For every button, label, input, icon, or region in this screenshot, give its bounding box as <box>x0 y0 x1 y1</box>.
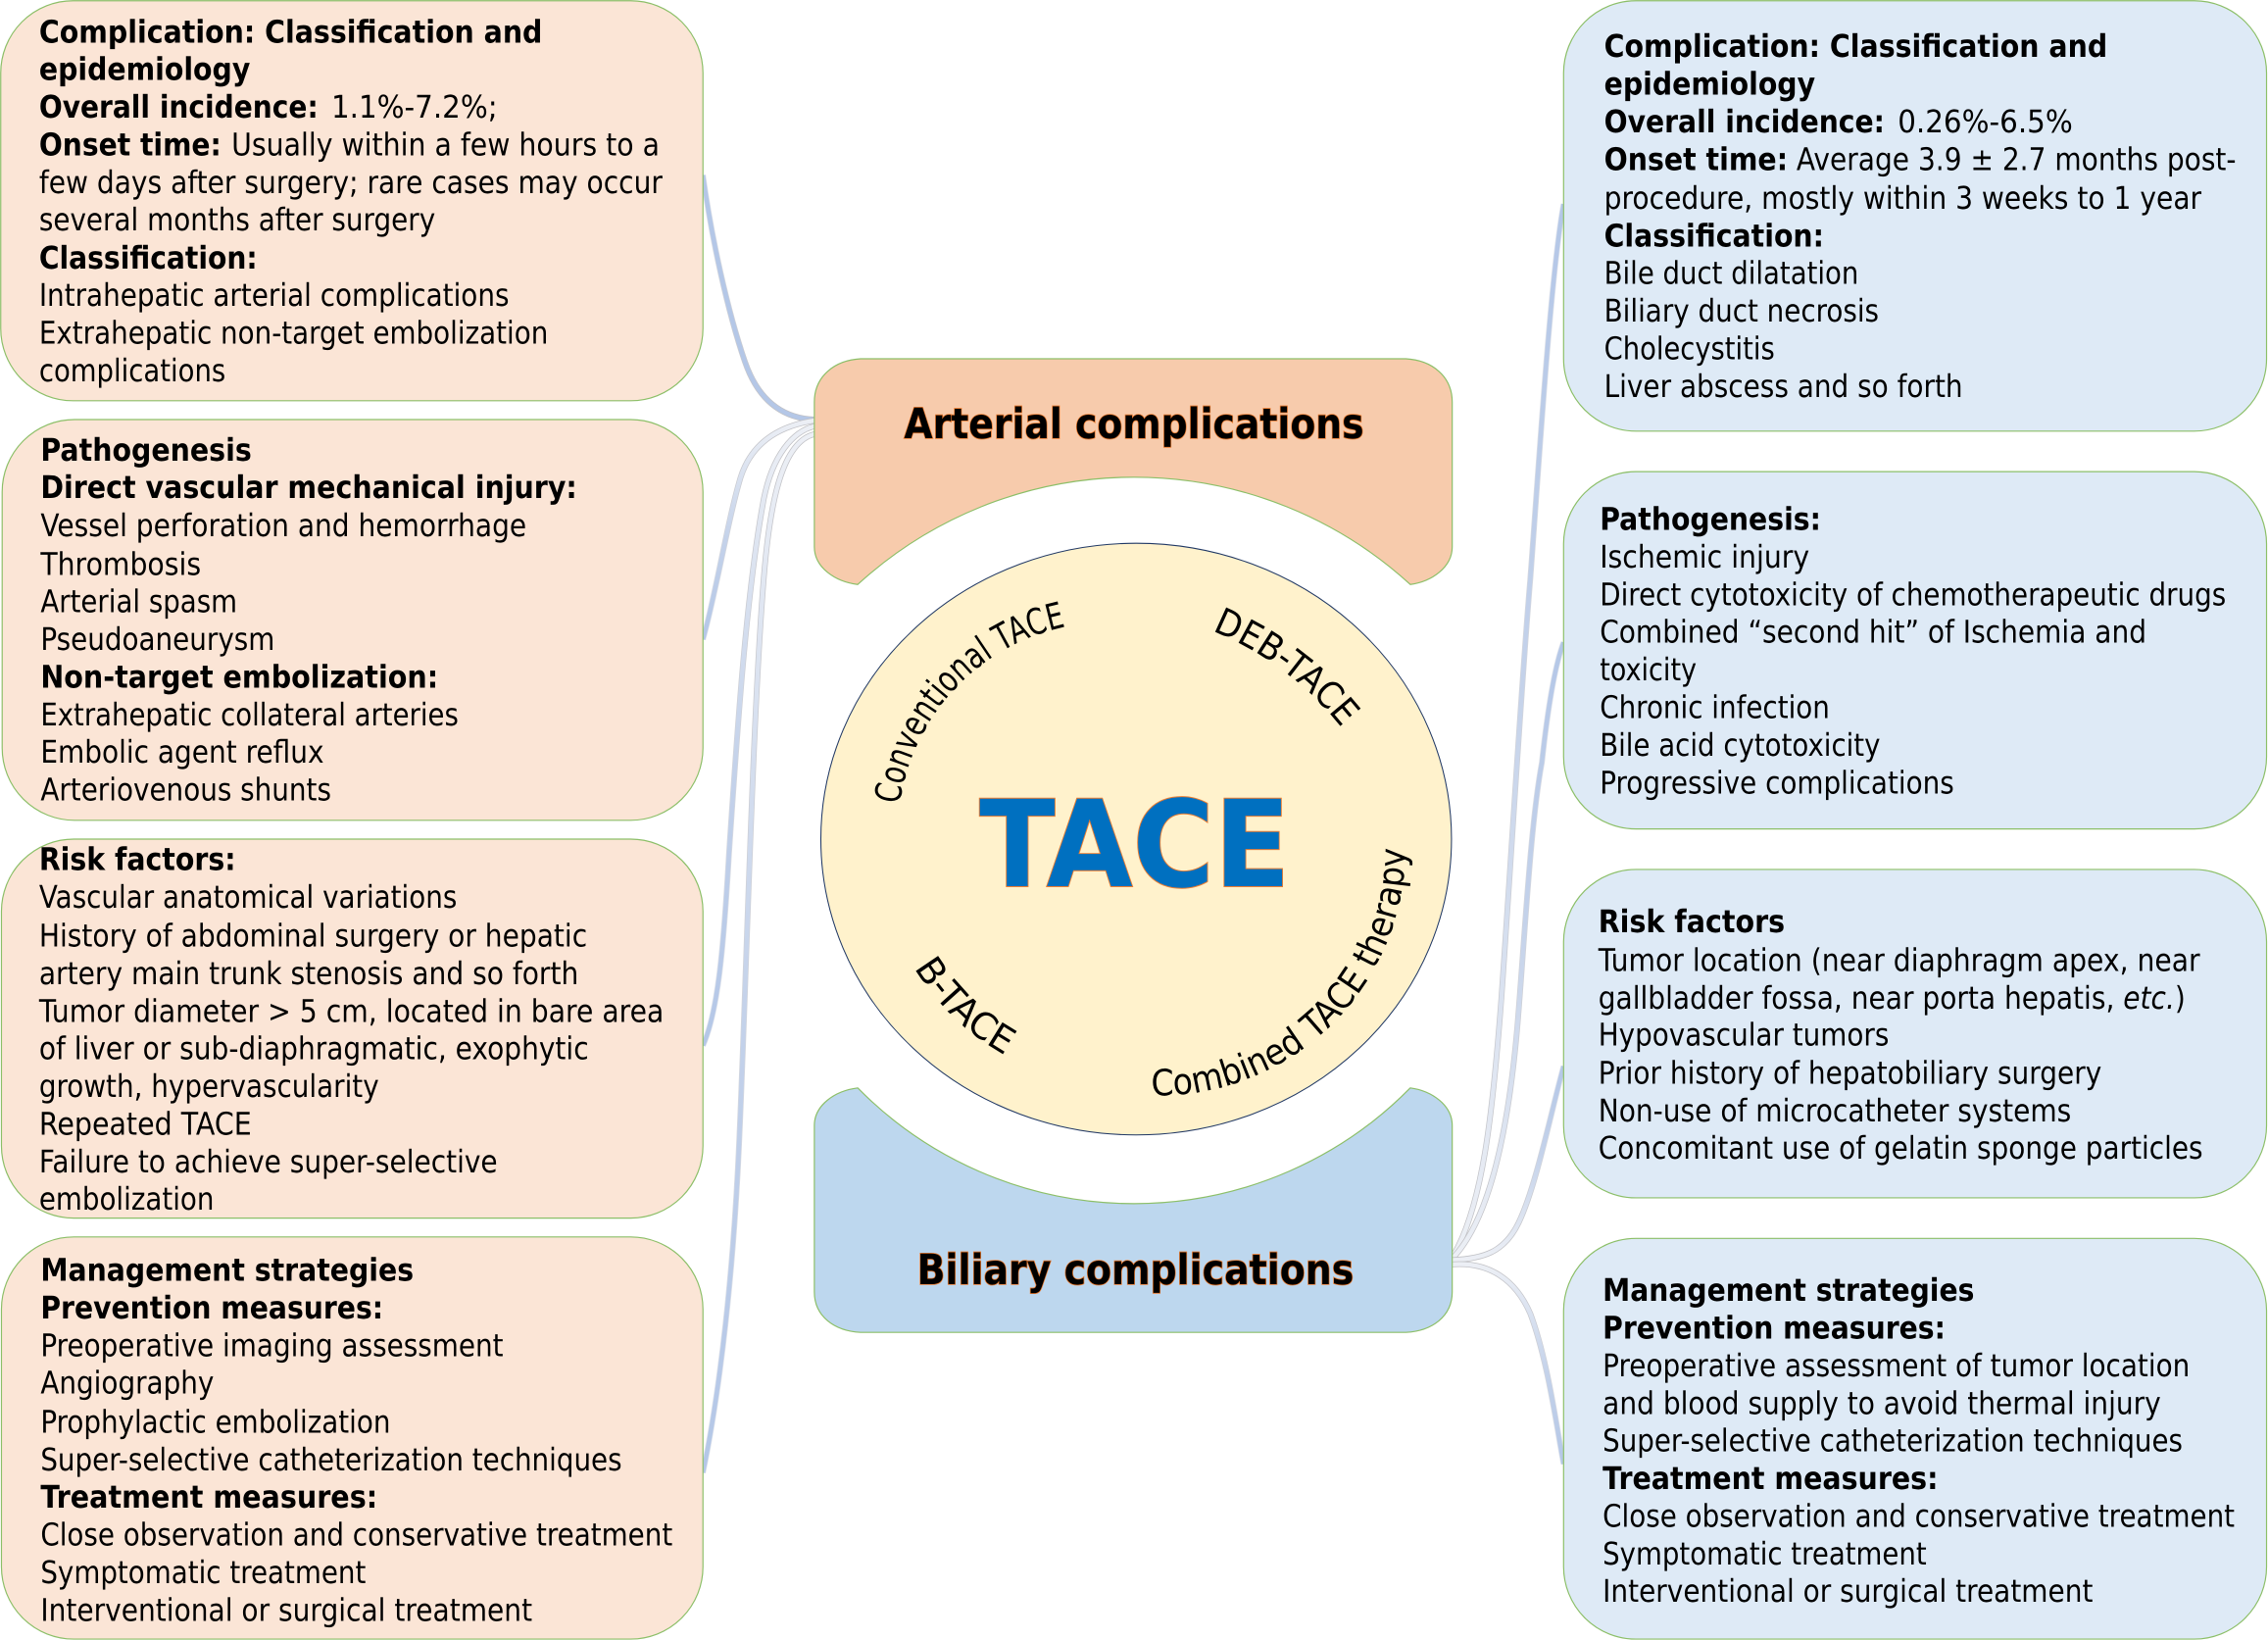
connectors: biliary complications to right panels <box>1453 204 1563 1465</box>
text block: arterial risk factors: Tumor diameter > 5 cm, located in bare area <box>38 994 664 1030</box>
text block: arterial pathogenesis: Non-target embolization: <box>40 660 438 696</box>
text block: biliary risk factors: Risk factors <box>1599 905 1785 941</box>
text block: arterial classification <box>39 15 663 390</box>
text block: biliary classification <box>1604 29 2237 406</box>
text block: biliary management: Interventional or surgical treatment <box>1602 1574 2093 1611</box>
text block: arterial management: Preoperative imaging assessment <box>40 1328 504 1365</box>
text block: biliary risk factors: Hypovascular tumors <box>1599 1018 1889 1054</box>
panel: arterial management strategies <box>1 1237 703 1639</box>
text block: arterial risk factors: Repeated TACE <box>39 1107 252 1143</box>
curved label: DEB-TACE: DEB-TACE <box>1215 608 1360 725</box>
text block: biliary classification: Overall incidence: <box>1604 105 1885 141</box>
text block: biliary risk factors: Prior history of hepatobiliary surgery <box>1599 1056 2102 1092</box>
text block: arterial management: Symptomatic treatment <box>40 1556 366 1592</box>
connectors: arterial complications to left panels <box>703 175 815 1472</box>
text block: arterial risk factors: of liver or sub-diaphragmatic, exophytic <box>39 1032 589 1068</box>
text block: biliary management <box>1602 1273 2235 1611</box>
text block: biliary pathogenesis: Ischemic injury <box>1600 540 1809 576</box>
panel: arterial classification and epidemiology <box>1 1 703 401</box>
text block: arterial pathogenesis: Vessel perforation and hemorrhage <box>40 509 526 545</box>
text block: arterial classification: Intrahepatic arterial complications <box>39 278 509 315</box>
text block: biliary pathogenesis: toxicity <box>1600 653 1697 689</box>
text block: arterial risk factors: Vascular anatomical variations <box>39 880 457 917</box>
title: TACE: TACE <box>979 774 1290 916</box>
text block: biliary classification: epidemiology <box>1604 67 1815 103</box>
text block: arterial classification: several months after surgery <box>39 203 435 239</box>
text block: arterial classification: 1.1%-7.2%; <box>331 90 498 126</box>
text block: arterial risk factors <box>38 842 664 1218</box>
text block: biliary classification: procedure, mostly within 3 weeks to 1 year <box>1604 181 2201 218</box>
text block: arterial pathogenesis <box>39 433 577 809</box>
text block: biliary pathogenesis: Combined “second hit” of Ischemia and <box>1600 616 2146 652</box>
text block: biliary classification: 0.26%-6.5% <box>1898 105 2073 141</box>
text block: biliary classification: Cholecystitis <box>1604 331 1775 368</box>
text block: arterial classification: Complication: Classification and <box>39 15 542 51</box>
text block: arterial risk factors: artery main trunk stenosis and so forth <box>39 957 578 993</box>
curved label: conventional TACE: Conventional TACE <box>874 602 1064 802</box>
text block: biliary management: Treatment measures: <box>1602 1462 1939 1498</box>
banner: arterial complications <box>814 359 1453 584</box>
text block: arterial classification: Extrahepatic non-target embolization <box>39 316 548 352</box>
text block: arterial management <box>40 1253 672 1629</box>
text block: arterial pathogenesis: Arterial spasm <box>40 585 237 621</box>
text block: biliary classification: Onset time: <box>1604 142 1788 178</box>
text block: biliary pathogenesis: Pathogenesis: <box>1600 503 1821 538</box>
text block: biliary classification: Biliary duct necrosis <box>1604 294 1879 330</box>
text block: arterial risk factors: embolization <box>39 1182 214 1218</box>
text block: biliary classification: Bile duct dilatation <box>1604 257 1858 293</box>
text block: biliary pathogenesis <box>1600 503 2226 802</box>
text block: arterial classification: Classification: <box>39 241 258 277</box>
text block: arterial pathogenesis: Thrombosis <box>39 547 201 583</box>
text block: biliary pathogenesis: Chronic infection <box>1600 690 1830 726</box>
text block: biliary management: and blood supply to avoid thermal injury <box>1602 1386 2161 1422</box>
curved label: combined TACE therapy: Combined TACE therapy <box>1153 849 1413 1096</box>
text block: arterial classification: few days after surgery; rare cases may occur <box>39 166 663 202</box>
panel: arterial risk factors <box>1 839 703 1218</box>
text block: biliary management: Preoperative assessment of tumor location <box>1602 1349 2190 1385</box>
text block: arterial pathogenesis: Pseudoaneurysm <box>40 622 274 659</box>
text block: arterial pathogenesis: Embolic agent reflux <box>40 735 324 771</box>
text block: biliary risk factors: Concomitant use of gelatin sponge particles <box>1599 1131 2203 1168</box>
text block: biliary classification: Liver abscess and so forth <box>1604 370 1963 406</box>
text block: arterial pathogenesis: Arteriovenous shunts <box>40 773 331 809</box>
text block: biliary pathogenesis: Progressive complications <box>1600 766 1954 802</box>
panel: biliary classification and epidemiology <box>1563 1 2267 431</box>
text block: arterial management: Treatment measures: <box>40 1480 377 1516</box>
text block: arterial management: Prevention measures: <box>40 1291 383 1327</box>
text block: arterial classification: complications <box>39 354 225 390</box>
text block: arterial risk factors: History of abdominal surgery or hepatic <box>39 919 587 955</box>
text block: biliary classification: Complication: Classification and <box>1604 29 2107 66</box>
curved label: B-TACE: B-TACE <box>915 956 1017 1055</box>
banner: biliary complications <box>814 1088 1453 1332</box>
text block: arterial pathogenesis: Extrahepatic collateral arteries <box>40 698 459 734</box>
text block: arterial management: Management strategies <box>40 1253 414 1289</box>
text block: arterial risk factors: growth, hypervascularity <box>39 1069 379 1106</box>
text block: arterial classification: Usually within a few hours to a <box>231 127 660 164</box>
text block: biliary pathogenesis: Bile acid cytotoxicity <box>1600 728 1881 765</box>
text block: biliary management: Management strategies <box>1602 1273 1974 1310</box>
text block: biliary management: Super-selective catheterization techniques <box>1602 1424 2183 1461</box>
panel: biliary management strategies <box>1563 1238 2267 1639</box>
text block: biliary risk factors: Tumor location (near diaphragm apex, near <box>1597 944 2200 980</box>
text block: arterial classification: Onset time: <box>39 127 222 164</box>
text block: arterial management: Close observation and conservative treatment <box>40 1518 672 1554</box>
text block: arterial management: Super-selective catheterization techniques <box>40 1443 622 1479</box>
text block: biliary risk factors: Non-use of microcatheter systems <box>1599 1094 2071 1130</box>
heading: biliary complications: Biliary complications <box>917 1245 1354 1294</box>
panel: biliary pathogenesis <box>1563 472 2267 829</box>
text block: biliary management: Prevention measures: <box>1602 1312 1946 1347</box>
central circle: TACE <box>819 543 1453 1135</box>
text block: arterial management: Interventional or surgical treatment <box>40 1593 532 1629</box>
text block: arterial management: Prophylactic embolization <box>40 1405 390 1441</box>
text block: biliary risk factors <box>1597 905 2203 1168</box>
text block: arterial classification: epidemiology <box>39 53 250 89</box>
panel: biliary risk factors <box>1563 870 2267 1198</box>
text block: arterial risk factors: Failure to achieve super-selective <box>39 1145 498 1181</box>
text block: arterial classification: Overall incidence: <box>39 90 319 126</box>
text block: arterial management: Angiography <box>40 1367 215 1402</box>
text block: biliary management: Symptomatic treatment <box>1602 1537 1927 1573</box>
text block: arterial pathogenesis: Pathogenesis <box>40 433 252 470</box>
heading: arterial complications: Arterial complications <box>904 399 1364 449</box>
panel: arterial pathogenesis <box>2 420 703 820</box>
text block: biliary classification: Classification: <box>1604 219 1824 255</box>
text block: biliary risk factors: gallbladder fossa, near porta hepatis, etc.) <box>1599 981 2186 1018</box>
text block: arterial pathogenesis: Direct vascular mechanical injury: <box>40 471 577 507</box>
text block: arterial risk factors: Risk factors: <box>39 842 236 878</box>
